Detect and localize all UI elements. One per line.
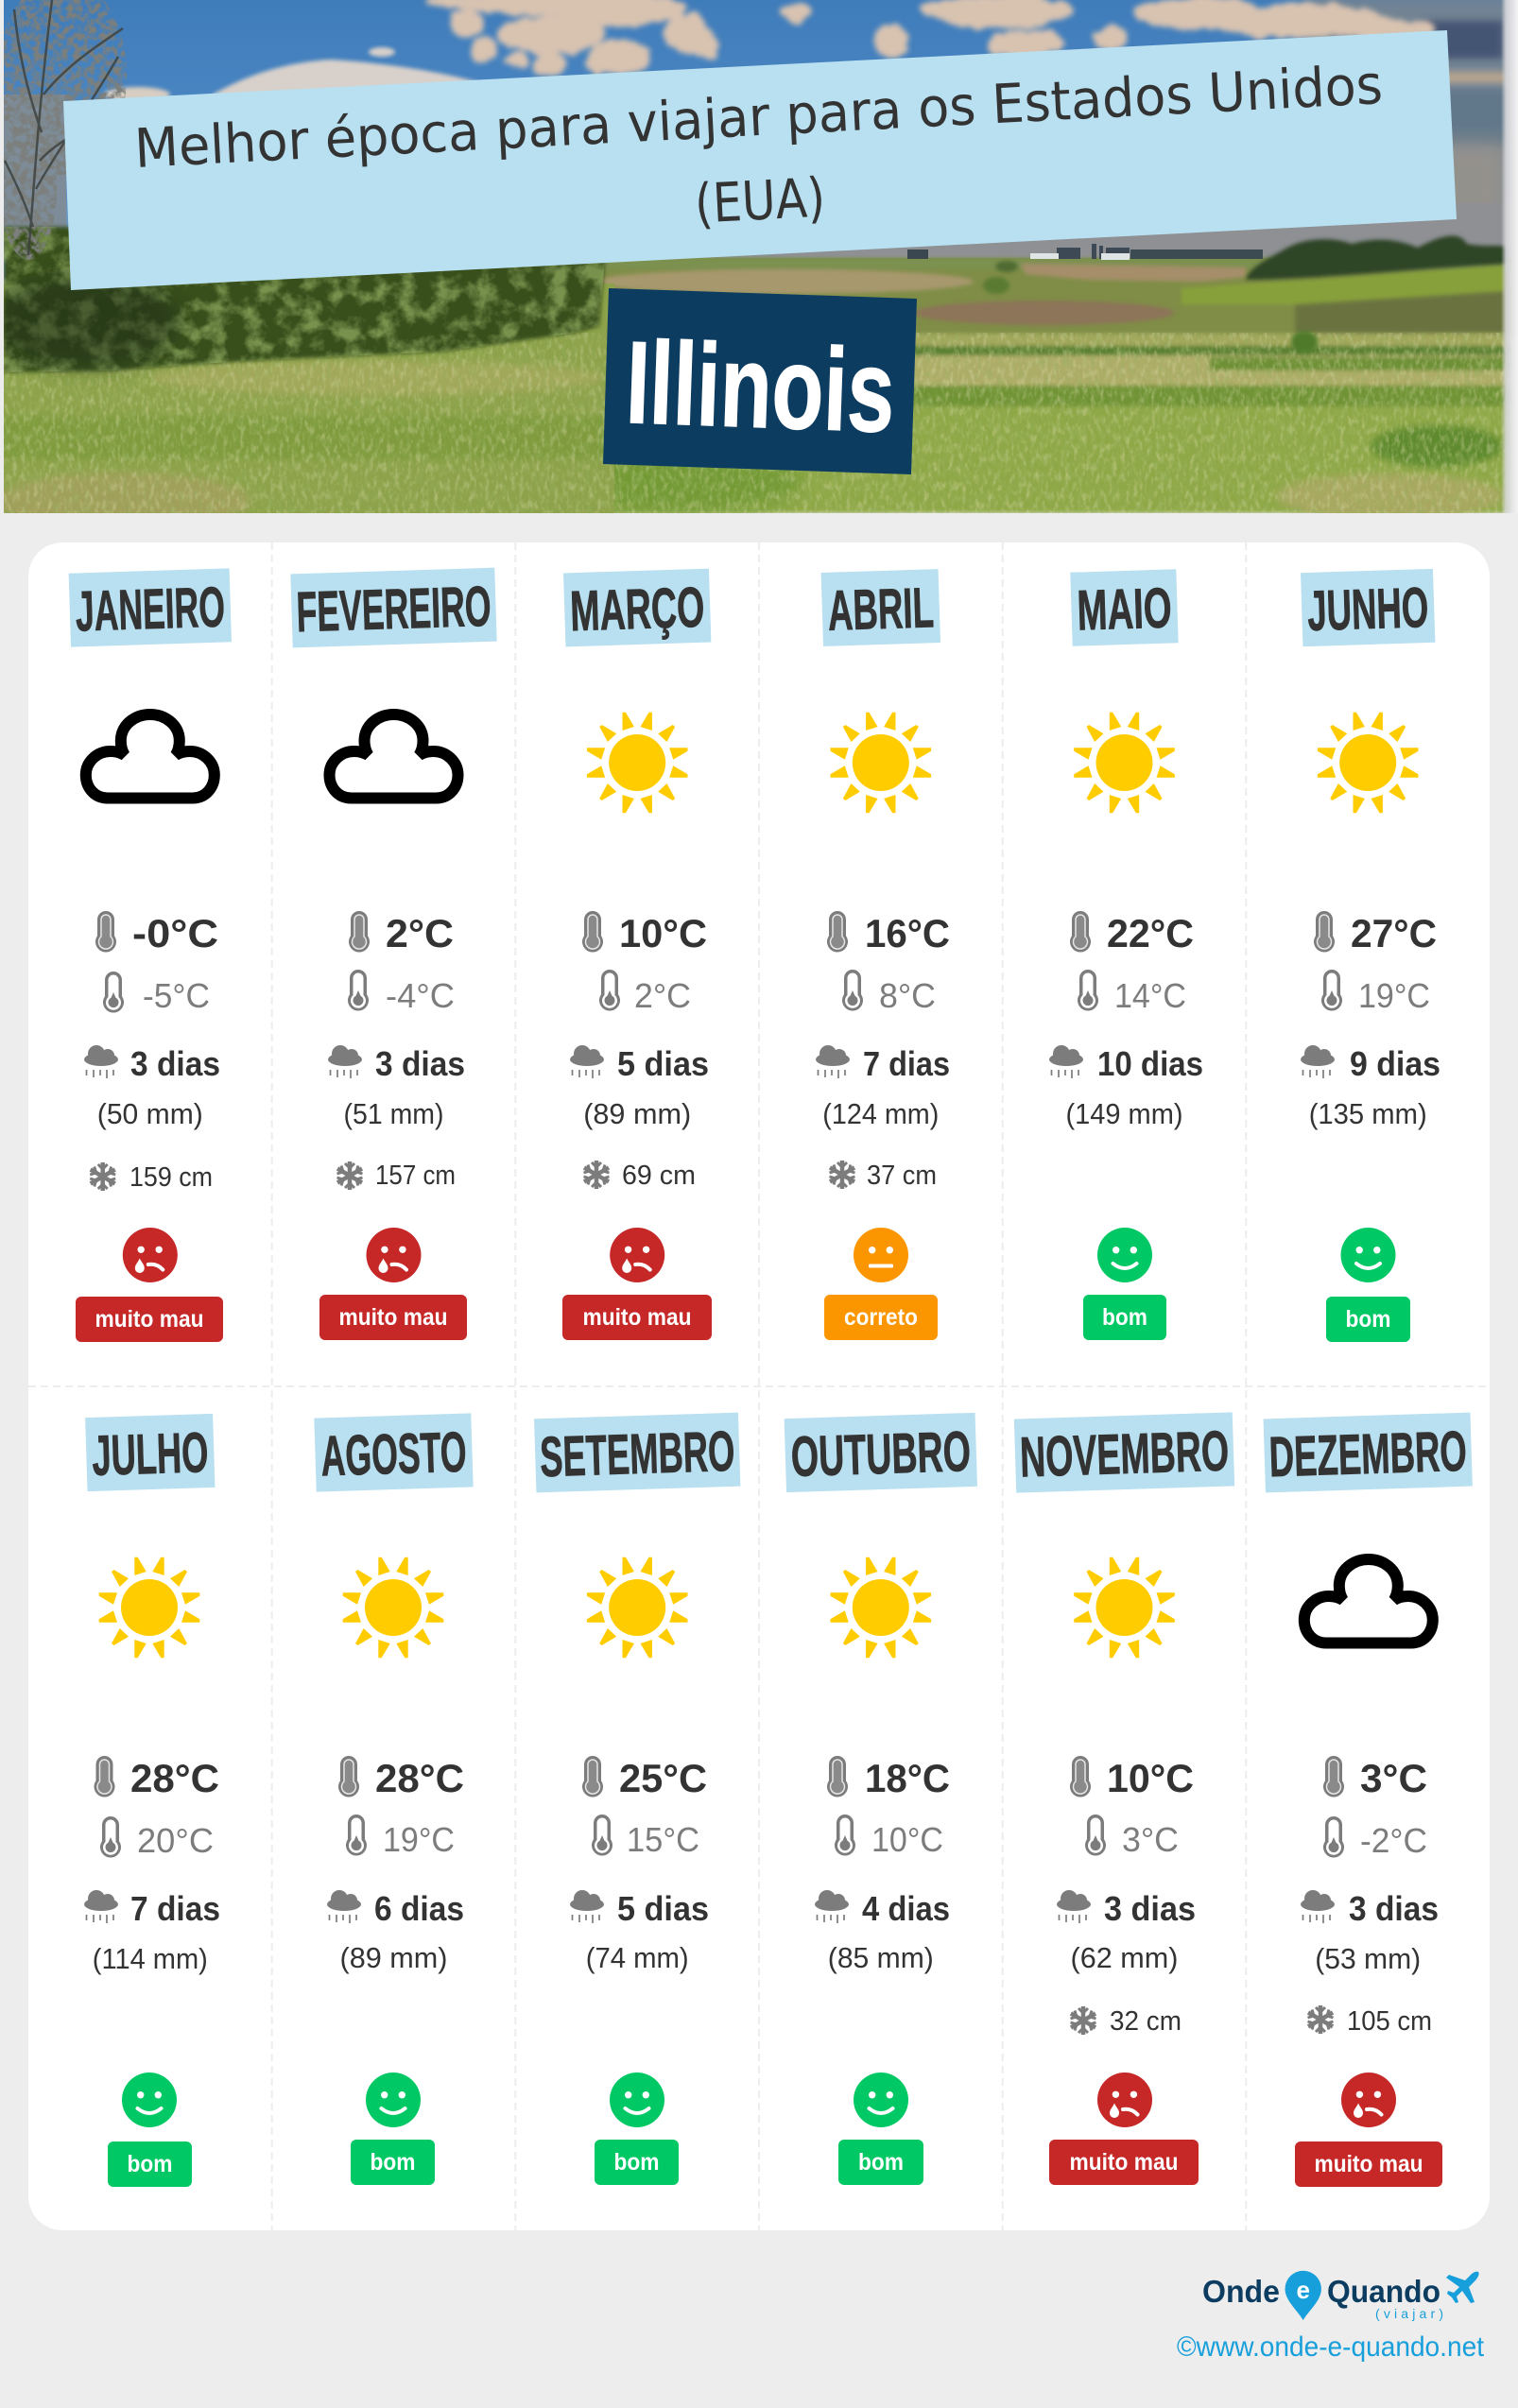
icon: sad face [1097, 2073, 1152, 2127]
month: outubro [785, 1413, 977, 2185]
farmland bands [567, 258, 1518, 338]
month: dezembro [1264, 1413, 1473, 2187]
min temperature: 19°C [383, 1820, 455, 1859]
rating badge [1295, 2141, 1442, 2187]
max temperature [827, 911, 950, 955]
rainfall: (51 mm) [344, 1097, 444, 1130]
icon: sad face [1341, 2073, 1396, 2127]
rain days: 5 dias [617, 1889, 709, 1928]
rain days [570, 1044, 709, 1083]
left tree line [4, 227, 662, 372]
heading: JULHO: JULHO [91, 1420, 209, 1488]
title banner: (EUA) [693, 167, 827, 236]
left meadow [0, 284, 614, 515]
min temperature: 19°C [1358, 976, 1430, 1015]
rain days: 3 dias [375, 1044, 465, 1083]
rain days [328, 1044, 465, 1083]
region label: Illinois: Illinois [624, 318, 897, 457]
rating badge: bom [614, 2149, 660, 2176]
max temperature: 27°C [1351, 911, 1437, 955]
region label: Illinois [603, 288, 917, 474]
rating badge: bom [1346, 1306, 1391, 1333]
icon: sun [587, 713, 688, 813]
max temperature [349, 911, 454, 955]
icon: sun [1074, 713, 1175, 813]
rain days [815, 1889, 950, 1928]
rainfall: (135 mm) [1309, 1097, 1427, 1130]
rainfall: (89 mm) [340, 1941, 448, 1974]
heading: FEVEREIRO: FEVEREIRO [296, 575, 492, 644]
rating badge: bom [371, 2149, 416, 2176]
rating badge: muito mau [1314, 2151, 1423, 2177]
icon: sun [1074, 1557, 1175, 1658]
snowfall: 37 cm [867, 1161, 937, 1191]
rating badge [1326, 1297, 1410, 1342]
rain days: 4 dias [862, 1889, 950, 1928]
rating badge: bom [858, 2149, 904, 2176]
min temperature [100, 1816, 214, 1860]
rain days [84, 1889, 220, 1928]
heading: JANEIRO: JANEIRO [75, 576, 226, 643]
month: maio [1049, 569, 1203, 1340]
rainfall: (50 mm) [97, 1097, 203, 1130]
fine grass texture [4, 333, 1507, 513]
min temperature [103, 972, 210, 1015]
rain days [570, 1889, 709, 1928]
min temperature [599, 970, 691, 1015]
month: abril [816, 569, 950, 1340]
snowfall [1070, 2006, 1182, 2037]
rating badge: muito mau [1070, 2149, 1178, 2176]
rainfall: (124 mm) [822, 1097, 939, 1130]
month: julho [84, 1414, 220, 2187]
rain days: 5 dias [617, 1044, 709, 1083]
rain days: 7 dias [863, 1044, 950, 1083]
rating badge [838, 2140, 923, 2185]
icon: cloud [329, 714, 457, 798]
min temperature: 14°C [1114, 976, 1186, 1015]
rain days: 6 dias [374, 1889, 464, 1928]
heading: FEVEREIRO [290, 568, 497, 647]
rating badge: bom [1102, 1304, 1147, 1331]
max temperature: 10°C [619, 911, 707, 955]
icon: sun [830, 713, 931, 813]
min temperature: 3°C [1122, 1820, 1179, 1859]
snowfall: 32 cm [1110, 2006, 1182, 2037]
bare tree at left [0, 0, 127, 175]
icon: happy face [1097, 1228, 1152, 1282]
icon: sun [99, 1557, 199, 1658]
icon: sun [830, 1557, 931, 1658]
max temperature [1070, 1756, 1194, 1800]
rain days [816, 1044, 950, 1083]
heading: OUTUBRO [785, 1413, 977, 1492]
rainfall: (74 mm) [586, 1941, 689, 1974]
icon: happy face [854, 2073, 908, 2127]
snowfall [830, 1161, 937, 1191]
rating badge [319, 1295, 467, 1340]
snowfall: 159 cm [129, 1162, 213, 1193]
rainfall: (114 mm) [93, 1942, 208, 1975]
fluffy clouds [426, 0, 1437, 76]
heading: JUNHO [1301, 569, 1435, 646]
icon: happy face [1340, 1228, 1395, 1282]
month: fevereiro [290, 568, 497, 1340]
min temperature [835, 1815, 943, 1859]
rating badge: correto [844, 1304, 918, 1331]
rainfall: (85 mm) [828, 1941, 934, 1974]
heading: AGOSTO [314, 1413, 474, 1492]
min temperature [346, 1815, 455, 1859]
rainfall: (149 mm) [1066, 1097, 1183, 1130]
rating badge [108, 2141, 192, 2187]
max temperature [1314, 911, 1437, 955]
heading: ABRIL: ABRIL [827, 576, 935, 643]
min temperature: -2°C [1360, 1821, 1427, 1860]
icon: sun [1318, 713, 1418, 813]
icon: happy face [366, 2073, 421, 2127]
website url: ©www.onde-e-quando.net [1177, 2331, 1485, 2363]
rain days: 7 dias [130, 1889, 220, 1928]
month: março [562, 569, 712, 1340]
rating badge: muito mau [582, 1304, 692, 1331]
rain days [327, 1889, 464, 1928]
max temperature: 16°C [865, 911, 950, 955]
icon: sun [587, 1557, 688, 1658]
icon: sun [343, 1557, 443, 1658]
snowfall [90, 1162, 213, 1193]
heading: OUTUBRO: OUTUBRO [790, 1419, 972, 1488]
min temperature: 2°C [634, 976, 691, 1015]
rating badge [824, 1295, 938, 1340]
rain days: 3 dias [130, 1044, 220, 1083]
min temperature: 8°C [879, 976, 936, 1015]
icon: happy face [122, 2073, 177, 2127]
snowfall: 105 cm [1347, 2006, 1432, 2037]
far trees and farm buildings [1246, 235, 1508, 280]
rain days: 3 dias [1104, 1889, 1196, 1928]
rain days [1049, 1044, 1203, 1083]
icon: airplane [1446, 2272, 1479, 2303]
min temperature: -5°C [143, 976, 210, 1015]
min temperature [592, 1815, 699, 1859]
icon: map pin: e [1296, 2276, 1310, 2304]
rain days [84, 1044, 220, 1083]
rainfall: (53 mm) [1315, 1942, 1421, 1975]
heading: JULHO [85, 1414, 215, 1491]
rating badge: muito mau [95, 1306, 204, 1333]
rain days: 3 dias [1349, 1889, 1439, 1928]
snowfall [1308, 2005, 1432, 2037]
icon: cloud [86, 714, 215, 798]
max temperature: 25°C [619, 1756, 707, 1800]
snowfall: 69 cm [622, 1161, 696, 1191]
rainfall: (62 mm) [1070, 1941, 1178, 1974]
month: janeiro [69, 568, 232, 1342]
month: junho [1301, 569, 1440, 1342]
min temperature: 15°C [627, 1820, 699, 1859]
rain days: 9 dias [1350, 1044, 1440, 1083]
max temperature: -0°C [132, 911, 218, 955]
max temperature: 28°C [375, 1756, 464, 1800]
heading: MAIO [1070, 569, 1179, 646]
rating badge [595, 2140, 679, 2185]
heading: MARÇO [563, 569, 711, 646]
logo: Onde e Quando: Onde [1202, 2274, 1280, 2309]
icon: cloud [1304, 1559, 1433, 1643]
month: agosto [314, 1413, 474, 2185]
heading: NOVEMBRO: NOVEMBRO [1019, 1419, 1230, 1488]
min temperature [1321, 970, 1430, 1015]
heading: SETEMBRO [534, 1413, 740, 1492]
panel: monthly climate grid [28, 542, 1490, 2230]
logo: Onde e Quando: Quando [1327, 2274, 1440, 2309]
rain days [1301, 1889, 1439, 1928]
icon: sad face [123, 1228, 178, 1282]
icon: sad face [367, 1228, 422, 1282]
heading: NOVEMBRO [1014, 1412, 1234, 1493]
heading: JUNHO: JUNHO [1306, 576, 1429, 643]
rating badge [1083, 1295, 1166, 1340]
rating badge [562, 1295, 712, 1340]
heading: JANEIRO [69, 568, 232, 647]
max temperature: 10°C [1107, 1756, 1194, 1800]
rain days [1301, 1044, 1440, 1083]
month: novembro [1014, 1412, 1234, 2185]
min temperature [348, 970, 455, 1015]
max temperature [95, 911, 218, 955]
month: setembro [534, 1413, 740, 2185]
snowfall [584, 1161, 696, 1191]
rating badge: muito mau [338, 1304, 448, 1331]
max temperature: 22°C [1107, 911, 1194, 955]
min temperature: 10°C [871, 1820, 943, 1859]
max temperature [827, 1756, 950, 1800]
icon: happy face [610, 2073, 664, 2127]
max temperature: 2°C [386, 911, 454, 955]
heading: MARÇO: MARÇO [569, 576, 705, 643]
title banner: Melhor época para viajar para os Estados Unidos [133, 54, 1384, 181]
heading: SETEMBRO: SETEMBRO [539, 1419, 735, 1488]
icon: neutral face [854, 1228, 908, 1282]
rainfall: (89 mm) [583, 1097, 691, 1130]
heading: AGOSTO: AGOSTO [320, 1420, 468, 1488]
rating badge [76, 1297, 223, 1342]
icon: sad face [610, 1228, 664, 1282]
max temperature: 28°C [130, 1756, 219, 1800]
min temperature: 20°C [137, 1821, 214, 1860]
rating badge [1049, 2140, 1199, 2185]
min temperature [1085, 1815, 1179, 1859]
max temperature [1070, 911, 1194, 955]
min temperature [1323, 1816, 1427, 1860]
title banner [63, 30, 1457, 290]
min temperature [1078, 970, 1186, 1015]
heading: MAIO: MAIO [1077, 576, 1173, 643]
logo: Onde e Quando: (viajar) [1375, 2306, 1443, 2321]
max temperature: 18°C [865, 1756, 950, 1800]
rating badge [351, 2140, 435, 2185]
rating badge: bom [127, 2151, 172, 2177]
max temperature: 3°C [1360, 1756, 1427, 1800]
min temperature: -4°C [386, 976, 455, 1015]
rain days: 10 dias [1097, 1044, 1203, 1083]
header photo: prairie landscape [0, 0, 1518, 529]
banked cloud at left [211, 57, 480, 94]
grey sky at the horizon [701, 221, 1504, 258]
rain days [1057, 1889, 1196, 1928]
icon: map pin [1285, 2271, 1321, 2320]
min temperature [842, 970, 936, 1015]
snowfall [336, 1161, 456, 1191]
bushes on the field [983, 261, 1318, 353]
max temperature [1323, 1756, 1427, 1800]
logo: Onde e Quando [1202, 2271, 1479, 2321]
heading: ABRIL [821, 569, 940, 646]
snowfall: 157 cm [375, 1161, 456, 1191]
